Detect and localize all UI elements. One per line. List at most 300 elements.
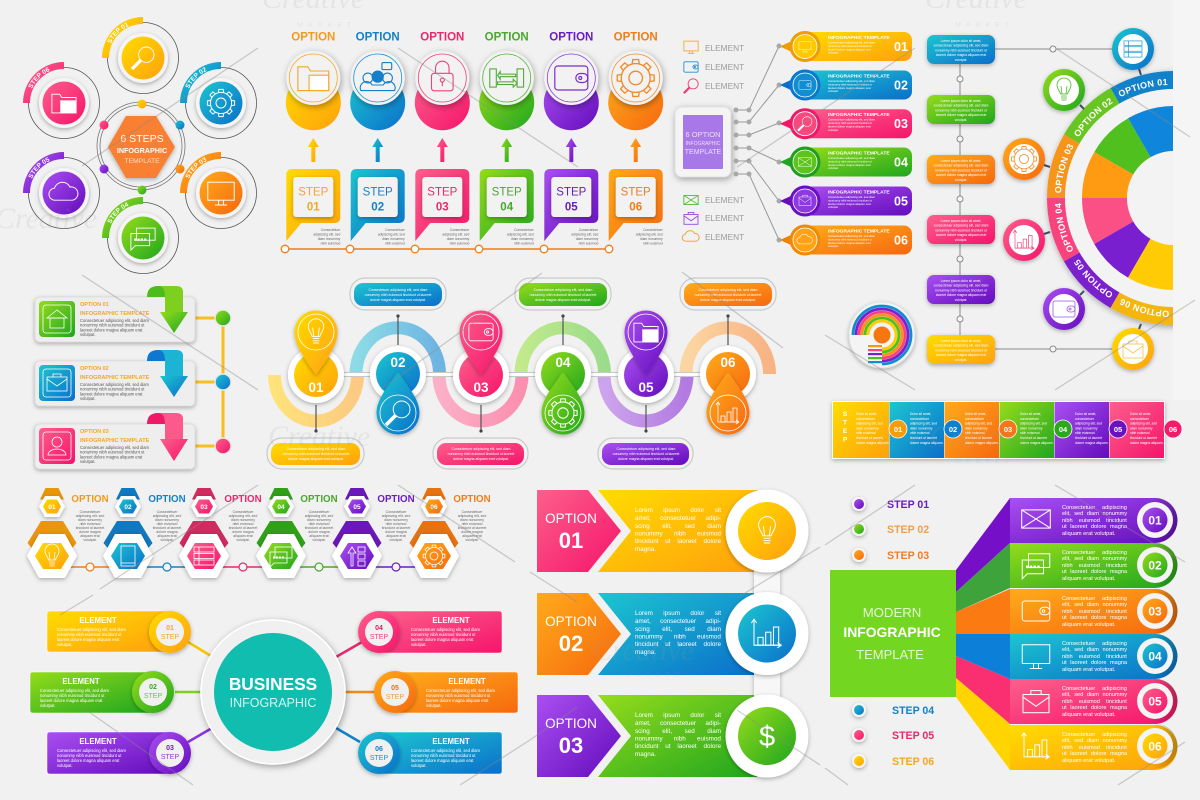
text box green: laoreet dolore magna aliquam erat [936,113,986,117]
text box yellow [927,335,995,364]
callouts [267,278,776,469]
hex option 04: aliquam erat [309,534,329,538]
vertical label STEP: S [843,411,848,418]
column 04: OPTION [485,32,529,44]
wheel chart: OPTION 01 [1118,78,1168,96]
card 02: OPTION 02 [80,366,109,372]
text: Creative [930,420,1032,453]
option 01 banner: scing elit, sed diam [635,523,721,530]
hex option 05: nibh euismod [386,522,406,526]
element card 06: 06 [375,746,383,753]
centre circle [201,620,345,764]
row 06 [780,224,912,256]
column 01: diam nonummy [318,237,341,241]
text box purple: nonummy nibh euismod tincidunt ut [935,288,987,292]
segment text: nibh euismod [1020,431,1040,435]
column 06: nibh euismod [643,242,663,246]
card 03: laoreet dolore magna aliquam erat [80,454,143,459]
hex option 04: tincidunt ut laoreet [305,526,333,530]
puzzle number tabs: 05 [1114,425,1122,434]
callout pills: Consectetuer adipiscing elit, sed diam [287,447,346,451]
hex option 06: volutpat. [465,538,479,542]
band 02: elit, sed diam nonummy [1062,556,1127,562]
hex option 03: 03 [200,504,208,511]
band 04: elit, sed diam nonummy [1062,647,1127,653]
text box green: consectetuer adipiscing elit, sed diam [934,104,989,108]
centre hexagon badge [97,100,185,194]
text: MARKET [955,458,1014,465]
segment text: dolore magna aliquam. [856,441,890,445]
hex option 03 [179,488,262,578]
band 01: aliquam erat volutpat. [1062,531,1116,537]
yellow connector [195,318,223,446]
centre hexagon badge: 6 STEPS [120,133,164,145]
hex option 03: aliquam erat [233,534,253,538]
segment text: tincidunt ut laoreet [965,436,992,440]
column 03: STEP [427,186,458,198]
icon: briefcase [1112,328,1154,370]
band 06: nibh euismod tincidunt [1062,745,1127,751]
option 01 banner [537,490,757,572]
text box orange: volutpat. [955,178,967,182]
centre label box [675,107,731,177]
legend: top elements: ELEMENT [705,43,744,53]
wheel chart: OPTION 03 [1055,144,1073,193]
option 01 banner: Lorem ipsum dolor sit [635,507,721,514]
callout pills: nonummy nibh euismod tincidunt ut laoreet [365,293,431,297]
segments [833,402,1164,458]
hex option 04: nibh euismod [309,522,329,526]
segment text: diam nonummy [856,426,879,430]
card 03: INFOGRAPHIC TEMPLATE [80,438,150,444]
callout pills: dolore magna aliquam erat volutpat. [288,457,344,461]
segment text: adipiscing elit, sed [1130,422,1157,426]
card 03 [35,413,231,469]
centre circle: BUSINESS [229,674,317,694]
element card 02: laoreet dolore magna aliquam erat [40,698,103,703]
node 06 with chart pin: 06 [720,355,736,370]
segment text: consectetuer [965,417,985,421]
icon circle: chart [726,592,808,675]
column 04: Consectetuer [514,228,535,232]
text box cyan: nonummy nibh euismod tincidunt ut [935,48,987,52]
option 03 banner: scing elit, sed diam [635,728,721,735]
column 05: adipiscing elit, sed [571,232,598,236]
band 03: nibh euismod tincidunt [1062,609,1127,615]
element card 06: Consectetuer adipiscing elit, sed diam [411,748,481,753]
step 04: STEP 04 [108,202,128,224]
card 02: laoreet dolore magna aliquam erat [80,391,143,396]
hex option 05: Consectetuer [386,510,407,514]
band 05: Consectetuer adipiscing [1062,686,1127,692]
band 03: 03 [1148,604,1162,618]
band 01: 01 [1148,514,1162,528]
hex option 02: volutpat. [160,538,174,542]
band 01: Consectetuer adipiscing [1062,505,1127,511]
node 03 with wallet pin [453,310,509,403]
option 02 banner: amet, consectetuer adipi- [635,618,721,625]
text box yellow: laoreet dolore magna aliquam erat [936,353,986,357]
icon: list [1112,28,1154,70]
text box orange: laoreet dolore magna aliquam erat [936,173,986,177]
row 02: volutpat. [828,89,839,93]
row 03: INFOGRAPHIC TEMPLATE [828,112,890,118]
row 02: 02 [894,78,908,92]
element card 01: STEP [161,634,179,641]
column 01: 01 [307,202,320,214]
band 05: aliquam erat volutpat. [1062,712,1116,718]
element card 03: nonummy nibh euismod tincidunt ut [57,753,122,758]
band 06: 06 [1148,740,1162,754]
segment text: Dolor sit amet, [1130,412,1151,416]
centre circle: INFOGRAPHIC [230,696,316,710]
element card 04 [358,611,502,653]
segment text: Dolor sit amet, [856,412,877,416]
band 06 [1010,724,1178,770]
row 04: laoreet dolore magna aliquam erat [828,163,871,167]
panel: option columns with step pins [281,32,664,253]
text box yellow: consectetuer adipiscing elit, sed diam [934,344,989,348]
element card 04: nonummy nibh euismod tincidunt ut [411,632,476,637]
hex option 03: volutpat. [236,538,250,542]
element card 05: STEP [386,694,404,701]
option 02 banner: tincidunt ut laoreet dolore [635,641,722,648]
panel: business infographic [30,611,518,774]
legend: top elements: ELEMENT [705,81,744,91]
card 01: laoreet dolore magna aliquam erat [80,327,143,332]
element card 06: STEP [370,755,388,762]
hex option 06: Consectetuer [462,510,483,514]
row 02: laoreet dolore magna aliquam erat [828,86,871,90]
wheel chart: OPTION 02 [1074,98,1113,136]
column 01 [286,32,341,246]
panel: option wheel with text boxes [924,27,1173,374]
wheel chart [1044,68,1173,331]
row 03: Consectetuer adipiscing elit, sed diam [828,118,876,122]
icon circle: bulb [726,490,808,572]
callout pills: dolore magna aliquam erat volutpat. [700,298,756,302]
row 02: Consectetuer adipiscing elit, sed diam [828,79,876,83]
band 03: aliquam erat volutpat. [1062,622,1116,628]
element card 04: volutpat. [411,642,426,647]
hex option 05: tincidunt ut laoreet [382,526,410,530]
hex option 04: volutpat. [312,538,326,542]
element card 02: Consectetuer adipiscing elit, sed diam [40,688,110,693]
row 06: nonummy nibh euismod tincidunt ut [828,237,872,241]
step 06 [23,62,100,139]
hex option 04: 04 [277,504,285,511]
segment text: consectetuer [856,417,876,421]
puzzle number tabs: 01 [894,425,902,434]
text box orange [927,155,995,184]
text box purple: laoreet dolore magna aliquam erat [936,293,986,297]
node 01 with bulb pin [288,310,344,403]
element card 01: 01 [166,625,174,632]
band 04 [1010,634,1178,679]
hex option 01 [27,488,109,578]
column 05 [544,32,599,246]
hex option 02: tincidunt ut laoreet [153,526,181,530]
row 04: volutpat. [828,166,839,170]
hex option 03: adipiscing elit, sed [229,514,257,518]
legend: bottom elements [682,195,744,242]
text box purple: Lorem ipsum dolor sit amet, [941,279,981,283]
option 03 banner: amet, consectetuer adipi- [635,720,721,727]
element card 03: ELEMENT [79,737,117,746]
icon: chart [1003,219,1045,261]
option 03 banner: Lorem ipsum dolor sit [635,712,721,719]
option 01 banner: tincidunt ut laoreet dolore [635,538,722,545]
node 06 with chart pin [700,346,756,434]
green title block: TEMPLATE [856,647,924,662]
element card 02: volutpat. [40,703,55,708]
option 02 banner: 02 [559,631,583,656]
row 04 [780,146,912,178]
column 03: diam nonummy [447,237,470,241]
text box pink: laoreet dolore magna aliquam erat [936,233,986,237]
segment text: nibh euismod [1075,431,1095,435]
element card 01: nonummy nibh euismod tincidunt ut [57,632,122,637]
row 05: volutpat. [828,205,839,209]
column 05: OPTION [549,32,593,44]
text box green: nonummy nibh euismod tincidunt ut [935,108,987,112]
text box cyan: Lorem ipsum dolor sit amet, [941,39,981,43]
option 01 banner: magna. [635,546,656,553]
hex option 06: nibh euismod [462,522,482,526]
option 01 banner: 01 [559,528,583,553]
hex option 06: adipiscing elit, sed [458,514,486,518]
segment text: nibh euismod [856,431,876,435]
segment text: tincidunt ut laoreet [910,436,937,440]
hex option 06: dolore magna [461,530,483,534]
hex option 04: Consectetuer [309,510,330,514]
element card 02: nonummy nibh euismod tincidunt ut [40,693,105,698]
centre hexagon badge: TEMPLATE [124,158,160,165]
node 01 with bulb pin: 01 [308,380,324,395]
band 03: Consectetuer adipiscing [1062,596,1127,602]
segment text: adipiscing elit, sed [1020,422,1047,426]
column 03: adipiscing elit, sed [442,232,469,236]
callout pills: Consectetuer adipiscing elit, sed diam [617,447,676,451]
band 01: elit, sed diam nonummy [1062,511,1127,517]
row 01: laoreet dolore magna aliquam erat [828,47,871,51]
element card 04: 04 [375,625,383,632]
green title block: MODERN [863,605,921,620]
text: Creative [592,634,694,667]
band 05: ut laoreet dolore magna [1062,705,1128,711]
text box pink [927,215,995,244]
hex option 02: adipiscing elit, sed [153,514,181,518]
legend: bottom elements: ELEMENT [705,213,744,223]
column 04 [479,32,535,246]
callout pills: dolore magna aliquam erat volutpat. [535,298,591,302]
node 02 with magnifier pin: 02 [390,355,406,370]
row 03: 03 [894,117,908,131]
segment text: diam nonummy [1020,426,1043,430]
row 01: volutpat. [828,51,839,55]
band 04: aliquam erat volutpat. [1062,667,1116,673]
panel: hexagon option row [27,488,491,578]
hex option 06: OPTION [453,494,491,505]
band 04: ut laoreet dolore magna [1062,660,1128,666]
step 05: STEP 05 [28,157,50,178]
segment text: consectetuer [1130,417,1150,421]
node 05 with folder pin [618,310,674,403]
segment text: diam nonummy [910,426,933,430]
hex option 02: OPTION [148,494,186,505]
column 01: Consectetuer [321,228,341,232]
element card 05: volutpat. [426,703,441,708]
step legend lower [852,703,934,768]
panel: wave timeline [267,278,776,469]
step legend lower: STEP 06 [892,756,934,768]
step legend upper: STEP 03 [887,550,929,562]
row 05: Consectetuer adipiscing elit, sed diam [828,195,876,199]
baseline [316,372,728,377]
legend: top elements: ELEMENT [705,62,744,72]
callout pills: nonummy nibh euismod tincidunt ut laoreet [283,452,349,456]
column 05: STEP [556,186,587,198]
column 06: STEP [621,186,651,198]
callout pills: nonummy nibh euismod tincidunt ut laoreet [613,452,679,456]
hex option 06 [409,488,491,578]
row 01 [780,31,912,62]
text box orange: nonummy nibh euismod tincidunt ut [935,168,987,172]
column 04: STEP [492,186,522,198]
segment text: tincidunt ut laoreet [1020,436,1047,440]
element card 04: Consectetuer adipiscing elit, sed diam [411,627,481,632]
segment text: tincidunt ut laoreet [856,436,883,440]
card 02: INFOGRAPHIC TEMPLATE [80,375,150,381]
node 04 with gear pin [535,346,591,434]
puzzle number tabs [889,420,1182,438]
panel: 6 option element list [675,31,912,256]
hex option 01: Consectetuer [80,510,101,514]
row 06: 06 [894,234,908,248]
option 02 banner: OPTION [545,614,597,629]
hex option 06: diam nonummy [460,518,484,522]
node 05 with folder pin: 05 [638,380,654,395]
hex option 04: diam nonummy [307,518,331,522]
hex option 04: dolore magna [308,530,330,534]
element card 03: 03 [166,745,174,752]
hex option 05: diam nonummy [384,518,408,522]
hex option 03: nibh euismod [233,522,253,526]
band 02: Consectetuer adipiscing [1062,550,1127,556]
step 06: STEP 06 [28,67,50,88]
card 01: volutpat. [80,332,95,337]
puzzle number tabs: 06 [1169,425,1177,434]
row 01: Consectetuer adipiscing elit, sed diam [828,40,876,44]
option 02 banner: scing elit, sed diam [635,626,721,633]
column 01: STEP [298,186,329,198]
column 02 [350,32,406,246]
segment text: nibh euismod [910,431,930,435]
element card 01 [47,611,191,653]
card 02: nonummy nibh euismod tincidunt ut [80,387,145,392]
band 02 [1010,542,1178,588]
text box pink: volutpat. [955,238,967,242]
icon circle: dollar [726,694,808,778]
step 01: STEP 01 [108,22,129,44]
element card 02: 02 [149,684,157,691]
green title block [830,570,956,697]
band 04: Consectetuer adipiscing [1062,641,1127,647]
column 01: nibh euismod [321,242,340,246]
hex option 04: OPTION [300,494,338,505]
hex option 02: aliquam erat [157,534,177,538]
row 02: nonummy nibh euismod tincidunt ut [828,82,872,86]
option 01 banner: amet, consectetuer adipi- [635,515,721,522]
segment text: Dolor sit amet, [965,412,986,416]
wheel chart: OPTION 05 [1074,260,1112,298]
segment text: dolore magna aliquam. [1020,441,1054,445]
column 02: STEP [363,186,393,198]
row 05 [780,186,912,216]
step 02 [180,62,257,139]
text box orange: Lorem ipsum dolor sit amet, [941,159,981,163]
element card 03: volutpat. [57,763,72,768]
hex option 01: 01 [48,504,56,511]
card 01: OPTION 01 [80,302,109,308]
band 05 [1010,678,1178,724]
segment text: tincidunt ut laoreet [1130,436,1157,440]
hex option 01: OPTION [71,494,109,505]
hex option 05: aliquam erat [386,534,406,538]
band 06: aliquam erat volutpat. [1062,758,1116,764]
step legend upper: STEP 02 [887,524,929,536]
element card 05 [374,671,518,713]
text box cyan: laoreet dolore magna aliquam erat [936,53,986,57]
card 02: Consectetuer adipiscing elit, sed diam [80,382,150,387]
row 05: laoreet dolore magna aliquam erat [828,202,871,206]
element card 02 [30,671,174,713]
hex option 04 [256,488,338,578]
row 01: INFOGRAPHIC TEMPLATE [828,35,890,41]
hex option 01: volutpat. [83,538,97,542]
column 06: diam nonummy [640,237,663,241]
hex option 03: OPTION [224,494,262,505]
step 01 [102,17,179,94]
callout pills: nonummy nibh euismod tincidunt ut laoreet [448,452,514,456]
card 03: nonummy nibh euismod tincidunt ut [80,450,145,455]
band 04: 04 [1148,650,1162,664]
hex option 03: diam nonummy [231,518,255,522]
callout pills: dolore magna aliquam erat volutpat. [370,298,426,302]
element card 01: Consectetuer adipiscing elit, sed diam [57,627,127,632]
segment text: consectetuer [910,417,930,421]
card 03: volutpat. [80,459,95,464]
callout pills: dolore magna aliquam erat volutpat. [453,457,509,461]
hex option 05: volutpat. [389,538,403,542]
column 04: 04 [500,202,514,214]
element card 05: Consectetuer adipiscing elit, sed diam [426,688,496,693]
hex option 01: diam nonummy [78,518,102,522]
row 04: INFOGRAPHIC TEMPLATE [828,150,890,156]
card 03: OPTION 03 [80,429,109,435]
callout pills: dolore magna aliquam erat volutpat. [618,457,674,461]
option 02 banner: Lorem ipsum dolor sit [635,610,721,617]
card 03: Consectetuer adipiscing elit, sed diam [80,445,150,450]
column 05: 05 [565,202,578,214]
wheel chart: OPTION 06 [1120,299,1169,317]
option 03 banner: OPTION [545,716,597,731]
column 02: diam nonummy [382,237,405,241]
option 01 banner: OPTION [545,511,597,526]
text: MARKET [955,22,1014,29]
step legend lower: STEP 04 [892,705,934,717]
text box cyan: consectetuer adipiscing elit, sed diam [934,44,989,48]
